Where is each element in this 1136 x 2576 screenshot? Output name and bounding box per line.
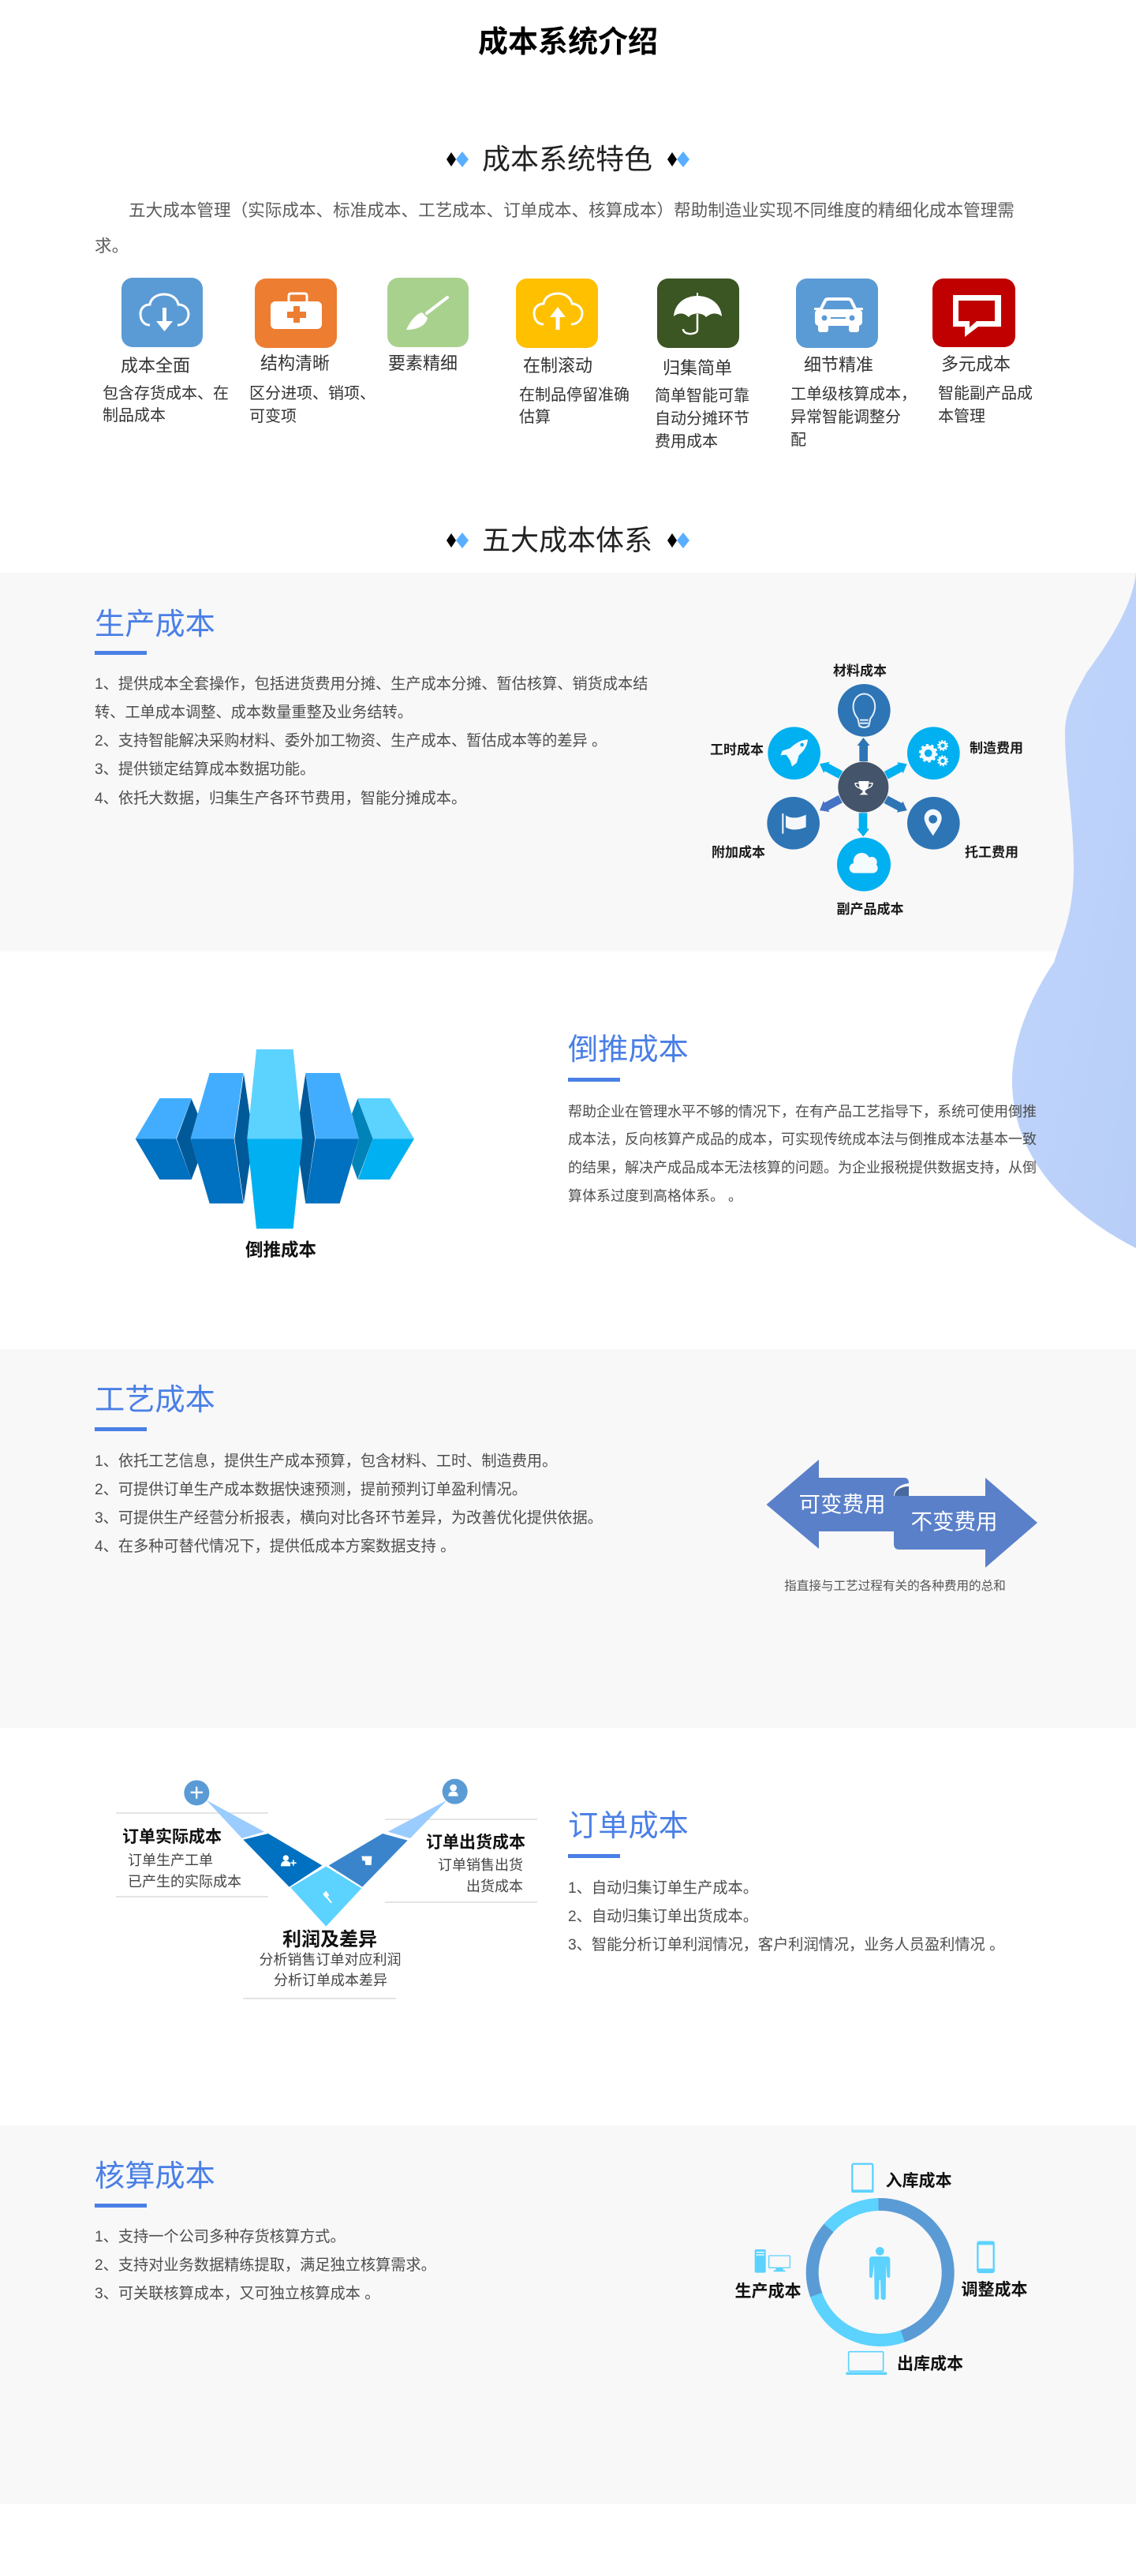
callout: 订单出货成本 <box>426 1833 525 1894</box>
list: 生产成本 features: 2、支持智能解决采购材料、委外加工物资、生产成本、暂估成本等的差异 。 <box>95 732 607 750</box>
chart caption: 倒推成本 <box>245 1240 316 1260</box>
intro paragraph: 求。 <box>95 236 129 256</box>
list: 核算成本 features: 2、支持对业务数据精练提取，满足独立核算需求。 <box>95 2256 436 2274</box>
chart: accounting ring: 调整成本 <box>961 2280 1027 2299</box>
list: 订单成本 features <box>568 1879 1004 1953</box>
feature: 多元成本: 智能副产品成 <box>938 384 1033 402</box>
intro paragraph: 五大成本管理（实际成本、标准成本、工艺成本、订单成本、核算成本）帮助制造业实现不同维度的精细化成本管理需 <box>129 200 1015 220</box>
caption: 工艺费用: 指直接与工艺过程有关的各种费用的总和 <box>784 1579 1006 1593</box>
text block: 倒推成本 description: 的结果，解决产成品成本无法核算的问题。为企业报税提供数据支持，从倒 <box>568 1160 1037 1176</box>
feature: 归集简单: 自动分摊环节 <box>655 409 749 428</box>
chart: stacked blocks <box>136 1049 414 1228</box>
feature: 归集简单: 费用成本 <box>655 432 718 451</box>
list: 工艺成本 features: 1、依托工艺信息，提供生产成本预算，包含材料、工时、制造费用。 <box>95 1453 557 1470</box>
list: 生产成本 features: 4、依托大数据，归集生产各环节费用，智能分摊成本。 <box>95 790 466 807</box>
arrows: variable and fixed cost <box>767 1460 1037 1568</box>
text block: 倒推成本 description: 成本法，反向核算产成品的成本，可实现传统成本法与倒推成本法基本一致 <box>568 1131 1037 1147</box>
list: 生产成本 features: 3、提供锁定结算成本数据功能。 <box>95 761 315 778</box>
chart: cost hub diagram: 托工费用 <box>965 845 1018 860</box>
chart: cost hub diagram: 附加成本 <box>712 844 765 860</box>
panel: 订单成本 <box>116 1779 1004 1998</box>
heading: 倒推成本 <box>568 1033 689 1082</box>
feature: 成本全面: 制品成本 <box>103 406 166 424</box>
feature: 细节精准: 异常智能调整分 <box>790 408 901 426</box>
feature: 成本全面 <box>103 278 229 424</box>
chart: accounting ring: 出库成本 <box>897 2354 963 2373</box>
list: 生产成本 features <box>95 675 648 807</box>
icon: medical case <box>255 279 337 348</box>
callout: 订单实际成本: 订单实际成本 <box>122 1827 222 1846</box>
list: 生产成本 features: 转、工单成本调整、成本数量重整及业务结转。 <box>95 704 413 721</box>
callout: 订单出货成本: 订单销售出货 <box>438 1857 523 1873</box>
icon: laptop <box>846 2352 887 2375</box>
heading: 五大成本体系: 五大成本体系 <box>482 524 652 556</box>
feature: 结构清晰: 区分进项、销项、 <box>249 384 376 402</box>
list: 订单成本 features: 1、自动归集订单生产成本。 <box>568 1879 758 1897</box>
icon: brush <box>387 278 469 347</box>
icon: cloud upload <box>516 279 598 348</box>
heading: 工艺成本: 工艺成本 <box>95 1383 215 1417</box>
list: 订单成本 features: 2、自动归集订单出货成本。 <box>568 1908 758 1925</box>
panel: 工艺成本 <box>0 1349 1136 1728</box>
feature: 多元成本: 本管理 <box>938 407 985 425</box>
heading: 订单成本: 订单成本 <box>568 1809 689 1843</box>
panel: 生产成本 <box>0 573 1136 952</box>
callout: 利润及差异: 分析销售订单对应利润 <box>259 1952 401 1968</box>
icon: desktop computer <box>755 2249 790 2273</box>
icon: car <box>796 279 878 348</box>
feature: 要素精细: 要素精细 <box>388 353 458 373</box>
feature: 细节精准: 配 <box>790 432 806 449</box>
feature: 归集简单 <box>655 279 749 451</box>
ring segments <box>784 2177 976 2368</box>
feature: 结构清晰: 结构清晰 <box>260 353 330 373</box>
callout: 订单出货成本: 出货成本 <box>466 1879 523 1894</box>
heading: 倒推成本: 倒推成本 <box>568 1033 689 1067</box>
list: 核算成本 features <box>95 2228 436 2302</box>
icon: phone <box>977 2241 995 2273</box>
arrows: variable and fixed cost: 不变费用 <box>910 1509 997 1534</box>
list: 订单成本 features: 3、智能分析订单利润情况，客户利润情况，业务人员盈利情况 。 <box>568 1936 1004 1953</box>
list: 工艺成本 features: 4、在多种可替代情况下，提供低成本方案数据支持 。 <box>95 1538 455 1555</box>
icon: speech bubble <box>932 279 1015 347</box>
list: 工艺成本 features <box>95 1453 603 1555</box>
feature: 细节精准: 细节精准 <box>804 355 873 375</box>
chart: cost hub diagram: 材料成本 <box>833 663 887 679</box>
callout: 利润及差异: 利润及差异 <box>282 1929 377 1950</box>
heading: 生产成本: 生产成本 <box>95 608 215 641</box>
panel: 倒推成本 <box>136 1033 1037 1260</box>
feature: 归集简单: 归集简单 <box>663 358 732 378</box>
text block: 倒推成本 description: 算体系过度到高格体系。 。 <box>568 1188 742 1204</box>
chart: cost hub diagram: 副产品成本 <box>836 901 904 917</box>
icon: tablet <box>851 2164 873 2193</box>
chart: accounting ring: 入库成本 <box>885 2171 951 2190</box>
feature: 成本全面: 成本全面 <box>121 356 190 376</box>
chart: cost hub diagram <box>710 663 1023 917</box>
callout: 订单实际成本: 订单生产工单 <box>128 1853 213 1868</box>
feature: 成本全面: 包含存货成本、在 <box>103 384 229 402</box>
icon: person <box>869 2247 890 2300</box>
intro paragraph <box>95 200 1015 256</box>
decorative blob: right side <box>1012 573 1136 1248</box>
feature: 细节精准: 工单级核算成本， <box>790 385 917 403</box>
list: 工艺成本 features: 3、可提供生产经营分析报表，横向对比各环节差异，为改善优化提供依据。 <box>95 1509 603 1527</box>
chart: V diagram <box>116 1779 537 1998</box>
heading: 订单成本 <box>568 1809 689 1858</box>
feature: 在制滚动: 在制滚动 <box>523 356 592 376</box>
feature: 在制滚动: 估算 <box>519 408 551 426</box>
list: 核算成本 features: 3、可关联核算成本，又可独立核算成本 。 <box>95 2285 379 2302</box>
feature: 归集简单: 简单智能可靠 <box>655 387 749 405</box>
callout: 订单实际成本: 已产生的实际成本 <box>128 1874 241 1890</box>
feature: 多元成本: 多元成本 <box>941 354 1011 374</box>
arrows: variable and fixed cost: 可变费用 <box>798 1492 885 1516</box>
callout: 利润及差异 <box>259 1929 401 1988</box>
feature: 结构清晰 <box>249 279 376 425</box>
chart: accounting ring <box>735 2164 1027 2375</box>
feature: 细节精准 <box>790 279 917 449</box>
chart: cost hub diagram: 工时成本 <box>710 742 764 757</box>
text block: 倒推成本 description: 帮助企业在管理水平不够的情况下，在有产品工艺指导下，系统可使用倒推 <box>568 1104 1037 1120</box>
list: 生产成本 features: 1、提供成本全套操作，包括进货费用分摊、生产成本分摊、暂估核算、销货成本结 <box>95 675 648 693</box>
icon: cloud download <box>121 278 203 347</box>
chart: accounting ring: 生产成本 <box>735 2282 802 2301</box>
title: 成本系统介绍 <box>478 26 658 59</box>
feature: 在制滚动 <box>516 279 630 426</box>
callout: 订单出货成本: 订单出货成本 <box>426 1833 525 1852</box>
feature: 要素精细 <box>387 278 469 373</box>
chart: cost hub diagram: 制造费用 <box>970 741 1023 756</box>
heading: 成本系统特色: 成本系统特色 <box>482 143 652 175</box>
panel: 核算成本 <box>0 2125 1136 2504</box>
heading: 核算成本: 核算成本 <box>95 2159 215 2193</box>
callout: 订单实际成本 <box>122 1827 241 1890</box>
feature: 多元成本 <box>932 279 1033 425</box>
callout: 利润及差异: 分析订单成本差异 <box>274 1972 387 1988</box>
feature: 结构清晰: 可变项 <box>249 407 297 425</box>
text block: 倒推成本 description <box>568 1104 1037 1204</box>
list: 工艺成本 features: 2、可提供订单生产成本数据快速预测，提前预判订单盈利情况。 <box>95 1481 527 1498</box>
feature: 在制滚动: 在制品停留准确 <box>519 386 630 404</box>
icon: umbrella <box>657 279 739 348</box>
list: 核算成本 features: 1、支持一个公司多种存货核算方式。 <box>95 2228 346 2245</box>
